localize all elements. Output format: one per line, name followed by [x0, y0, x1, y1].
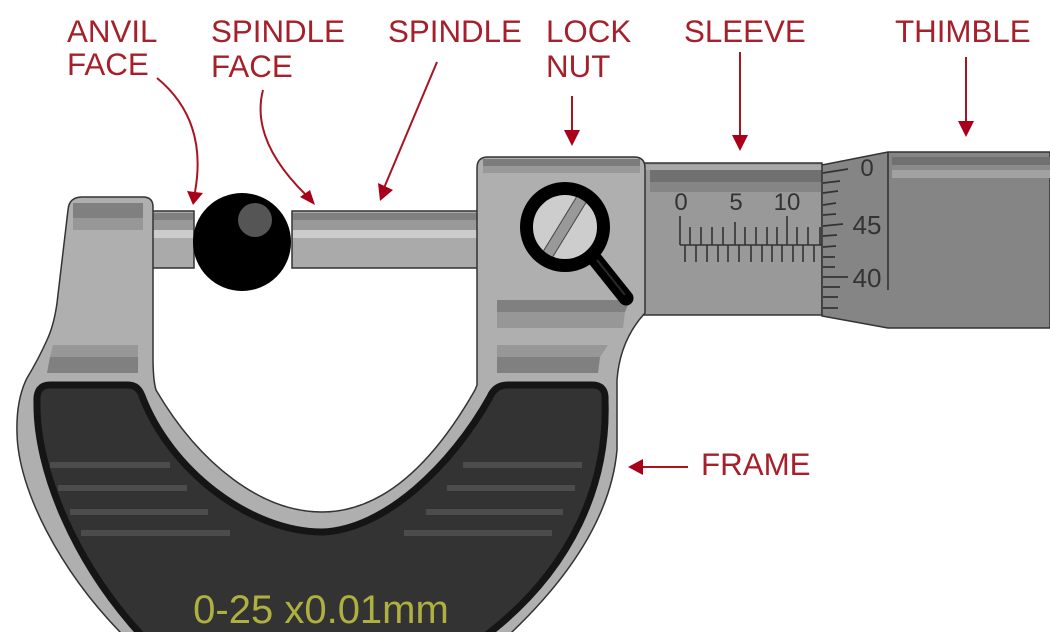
- arrow: spindle face: [261, 90, 315, 205]
- sleeve numbers: 5: [729, 189, 743, 216]
- thimble numbers: 40: [853, 263, 881, 293]
- label: thimble: THIMBLE: [895, 14, 1031, 49]
- anvil: [152, 211, 194, 268]
- label: frame: [628, 447, 811, 482]
- label: lock nut: NUT: [546, 49, 610, 84]
- sleeve numbers: [674, 189, 800, 216]
- grip text: 0-25 x0.01mm: [193, 588, 449, 632]
- label: frame: FRAME: [701, 447, 811, 482]
- sleeve numbers: 0: [674, 189, 688, 216]
- label: sleeve: SLEEVE: [684, 14, 806, 49]
- lock nut: [526, 188, 626, 298]
- grip lines: [50, 465, 582, 533]
- thimble numbers: 45: [853, 210, 881, 240]
- label: spindle face: SPINDLE: [211, 14, 345, 49]
- label: spindle: [378, 14, 522, 201]
- label: thimble: [895, 14, 1031, 137]
- label: spindle: SPINDLE: [388, 14, 522, 49]
- sleeve scale: [680, 216, 822, 262]
- label: spindle face: [211, 14, 345, 205]
- label: anvil face: ANVIL: [67, 14, 157, 49]
- spindle: [292, 211, 482, 268]
- arrow: sleeve: [732, 52, 748, 151]
- label: lock nut: LOCK: [546, 14, 631, 49]
- frame: [17, 157, 645, 632]
- label: lock nut: [546, 14, 631, 146]
- thimble numbers: [853, 155, 881, 293]
- arrow: lock nut: [564, 96, 580, 146]
- grip: [37, 385, 605, 632]
- label: sleeve: [684, 14, 806, 151]
- thimble: [822, 152, 1050, 328]
- thimble numbers: 0: [860, 155, 874, 182]
- label: anvil face: [67, 14, 203, 205]
- label: anvil face: FACE: [67, 47, 149, 82]
- arrow: anvil face: [157, 78, 203, 205]
- label: spindle face: FACE: [211, 49, 293, 84]
- arrow: spindle: [378, 62, 437, 201]
- thimble scale: [823, 169, 848, 308]
- sleeve numbers: 10: [774, 189, 800, 216]
- arrow: frame: [628, 459, 688, 475]
- sleeve: [644, 163, 822, 315]
- arrow: thimble: [958, 57, 974, 137]
- ball: [193, 193, 291, 291]
